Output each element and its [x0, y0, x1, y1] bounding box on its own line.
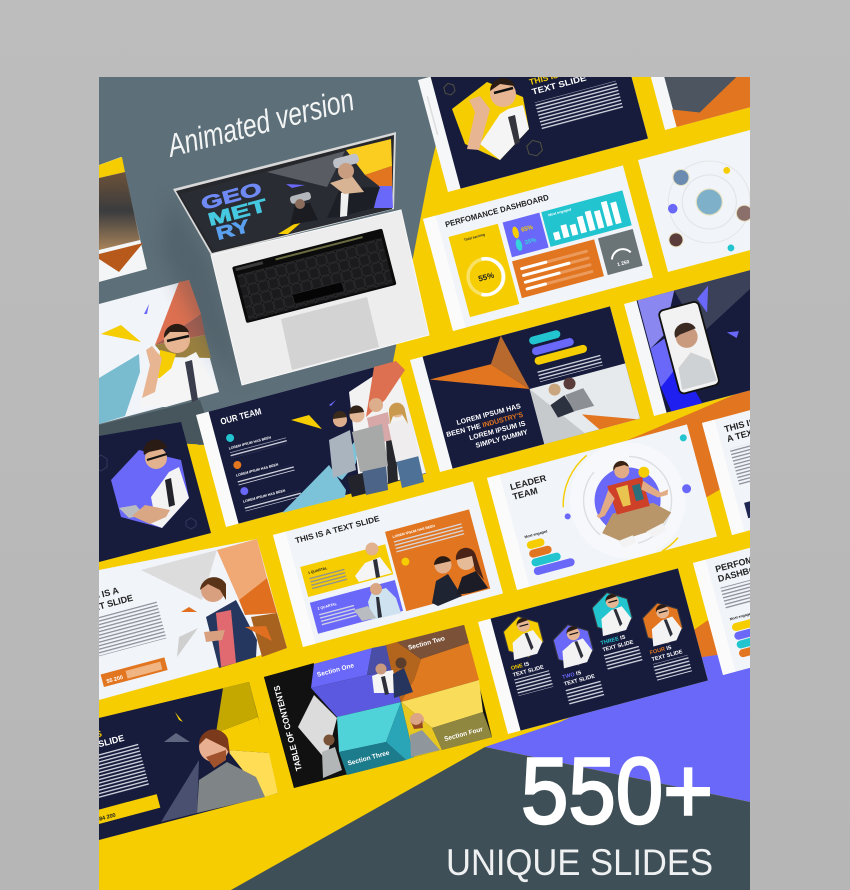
- orbit illustration: [562, 434, 692, 558]
- slide: hexagon man top: TEXT SLIDE: [531, 72, 588, 97]
- caption three: [600, 632, 643, 671]
- poster: [99, 77, 750, 890]
- slide title: [723, 416, 759, 444]
- caption one: [511, 657, 553, 696]
- caption two: TEXT SLIDE: [563, 674, 596, 688]
- keyboard: [232, 228, 397, 323]
- caption two: TWO IS: [562, 670, 582, 681]
- screen title: MET: [206, 195, 269, 230]
- grey gauge panel: 1 250: [617, 259, 630, 268]
- contents title: TABLE OF CONTENTS: [271, 684, 304, 772]
- slide: four hexagons: [478, 568, 708, 734]
- slide: left photo: [99, 157, 147, 282]
- slide headline: BEEN THE INDUSTRY'S: [446, 412, 524, 439]
- slide: this is a text slide: [273, 481, 503, 647]
- slide headline: LOREM IPSUM HAS: [456, 403, 522, 427]
- slide: our team: [196, 361, 426, 527]
- slide: lorem ipsum industry: [410, 306, 640, 472]
- caption four: FOUR IS: [649, 645, 673, 656]
- unique slides caption: UNIQUE SLIDES: [446, 842, 713, 883]
- hexagon two: [550, 620, 596, 670]
- slide title: A TEXT: [726, 426, 759, 444]
- team members list: LOREM IPSUM HAS BEEN: [228, 435, 272, 451]
- slide: orbit team: [638, 130, 750, 272]
- caption four: TEXT SLIDE: [651, 649, 684, 663]
- screen figures: [289, 153, 380, 225]
- slide title: THIS IS: [70, 728, 103, 746]
- screen title: GEO: [199, 178, 264, 214]
- team members list: LOREM IPSUM HAS BEEN: [236, 462, 279, 478]
- dark grey strip behind left slides: [99, 400, 204, 444]
- purple gender panel: 65%: [521, 225, 534, 234]
- photo area: [529, 362, 640, 444]
- slide: performance dashboard: [423, 165, 653, 331]
- slide: leader team: [487, 424, 717, 590]
- grey gauge panel: [598, 229, 643, 275]
- dark grey corner panel: [231, 747, 750, 890]
- hexagon one: [501, 612, 546, 662]
- orange progress panel: [512, 239, 604, 298]
- stat box: $5 200: [106, 675, 124, 685]
- stat box: $84 200: [96, 813, 117, 823]
- caption two: [562, 666, 604, 705]
- section two label: Section Two: [407, 635, 446, 652]
- slide title: THIS IS A: [78, 585, 120, 605]
- orange wedge lower right: [694, 620, 718, 658]
- slide title: THIS IS A TEXT SLIDE: [294, 514, 381, 545]
- engagement pills: [524, 530, 575, 575]
- engagement pills: Most engaged: [524, 529, 548, 539]
- grey-teal top-left panel: [99, 77, 452, 445]
- caption three: TEXT SLIDE: [602, 639, 634, 654]
- teal bar chart: [541, 190, 632, 247]
- hexagon three: [589, 588, 635, 638]
- animated version caption: Animated version: [162, 81, 358, 164]
- section four label: Section Four: [444, 726, 484, 743]
- slide title: PERFOMANCE: [714, 548, 779, 574]
- purple gender panel: 35%: [524, 237, 538, 246]
- purple gender panel: [503, 213, 549, 257]
- purple corner panel: [485, 650, 750, 802]
- laptop: [160, 132, 429, 385]
- 550+ headline: 550+: [521, 738, 713, 843]
- slide: hexagon man top: [418, 77, 648, 192]
- slide: man with tablet: [95, 422, 211, 562]
- orange band right: [626, 390, 750, 497]
- section three label: Section Three: [347, 750, 391, 767]
- people: [322, 658, 440, 778]
- slide title: DASHBOARD: [717, 559, 776, 584]
- slide: man with phone: TEXT SLIDE: [81, 593, 134, 616]
- slide: man with phone: [78, 539, 287, 700]
- yellow donut panel: 55%: [477, 271, 495, 284]
- slide: bearded man: TEXT SLIDE: [72, 733, 125, 756]
- slide: table of contents: [264, 625, 492, 788]
- caption four: [649, 641, 692, 681]
- yellow donut panel: [449, 224, 519, 317]
- screen title: [199, 178, 269, 244]
- caption three: THREE IS: [600, 634, 626, 647]
- teal bar chart: Most engaged: [548, 207, 572, 217]
- yellow donut panel: Total earning: [463, 233, 485, 242]
- slide: performance dashboard right: Most engaged: [729, 611, 753, 621]
- caption one: TEXT SLIDE: [512, 665, 545, 679]
- slide title: THIS IS A: [528, 68, 567, 87]
- hexagon four: [640, 598, 685, 648]
- slide: this is a text slide: 2 QUARTAL: [317, 602, 338, 611]
- team members list: [226, 434, 301, 512]
- slide: this is a text slide: 1 QUARTAL: [308, 566, 329, 575]
- slide title: LEADER: [509, 473, 548, 492]
- dashboard title: PERFOMANCE DASHBOARD: [444, 193, 550, 229]
- meditating leader: [596, 460, 672, 541]
- laptop screen: [173, 132, 396, 255]
- slide: this is a text right: [702, 369, 850, 535]
- laptop base: [211, 210, 429, 385]
- team members list: LOREM IPSUM HAS BEEN: [243, 488, 286, 504]
- slide: this is a text slide: LOREM IPSUM HAS BEEN: [392, 524, 436, 539]
- section one label: Section One: [316, 662, 355, 679]
- laptop shadow: [160, 195, 245, 385]
- slide: phone: [624, 270, 750, 416]
- slide: performance dashboard right: [693, 509, 850, 675]
- slide title: THIS IS: [723, 416, 756, 434]
- slide headline: [446, 404, 527, 448]
- caption one: ONE IS: [511, 661, 530, 672]
- team title: OUR TEAM: [219, 406, 262, 427]
- slide title: [510, 475, 546, 500]
- slide headline: LOREM IPSUM IS: [469, 420, 527, 442]
- slide: man with ok sign: [99, 280, 219, 424]
- slide: bearded man: [70, 682, 278, 840]
- slide title: TEAM: [511, 486, 539, 502]
- slide: orange photo top right: [650, 77, 750, 130]
- slide headline: SIMPLY DUMMY: [475, 429, 529, 450]
- phone mockup: [658, 301, 720, 395]
- screen title: RY: [214, 216, 252, 244]
- trackpad: [281, 297, 379, 370]
- yellow base: [99, 77, 750, 890]
